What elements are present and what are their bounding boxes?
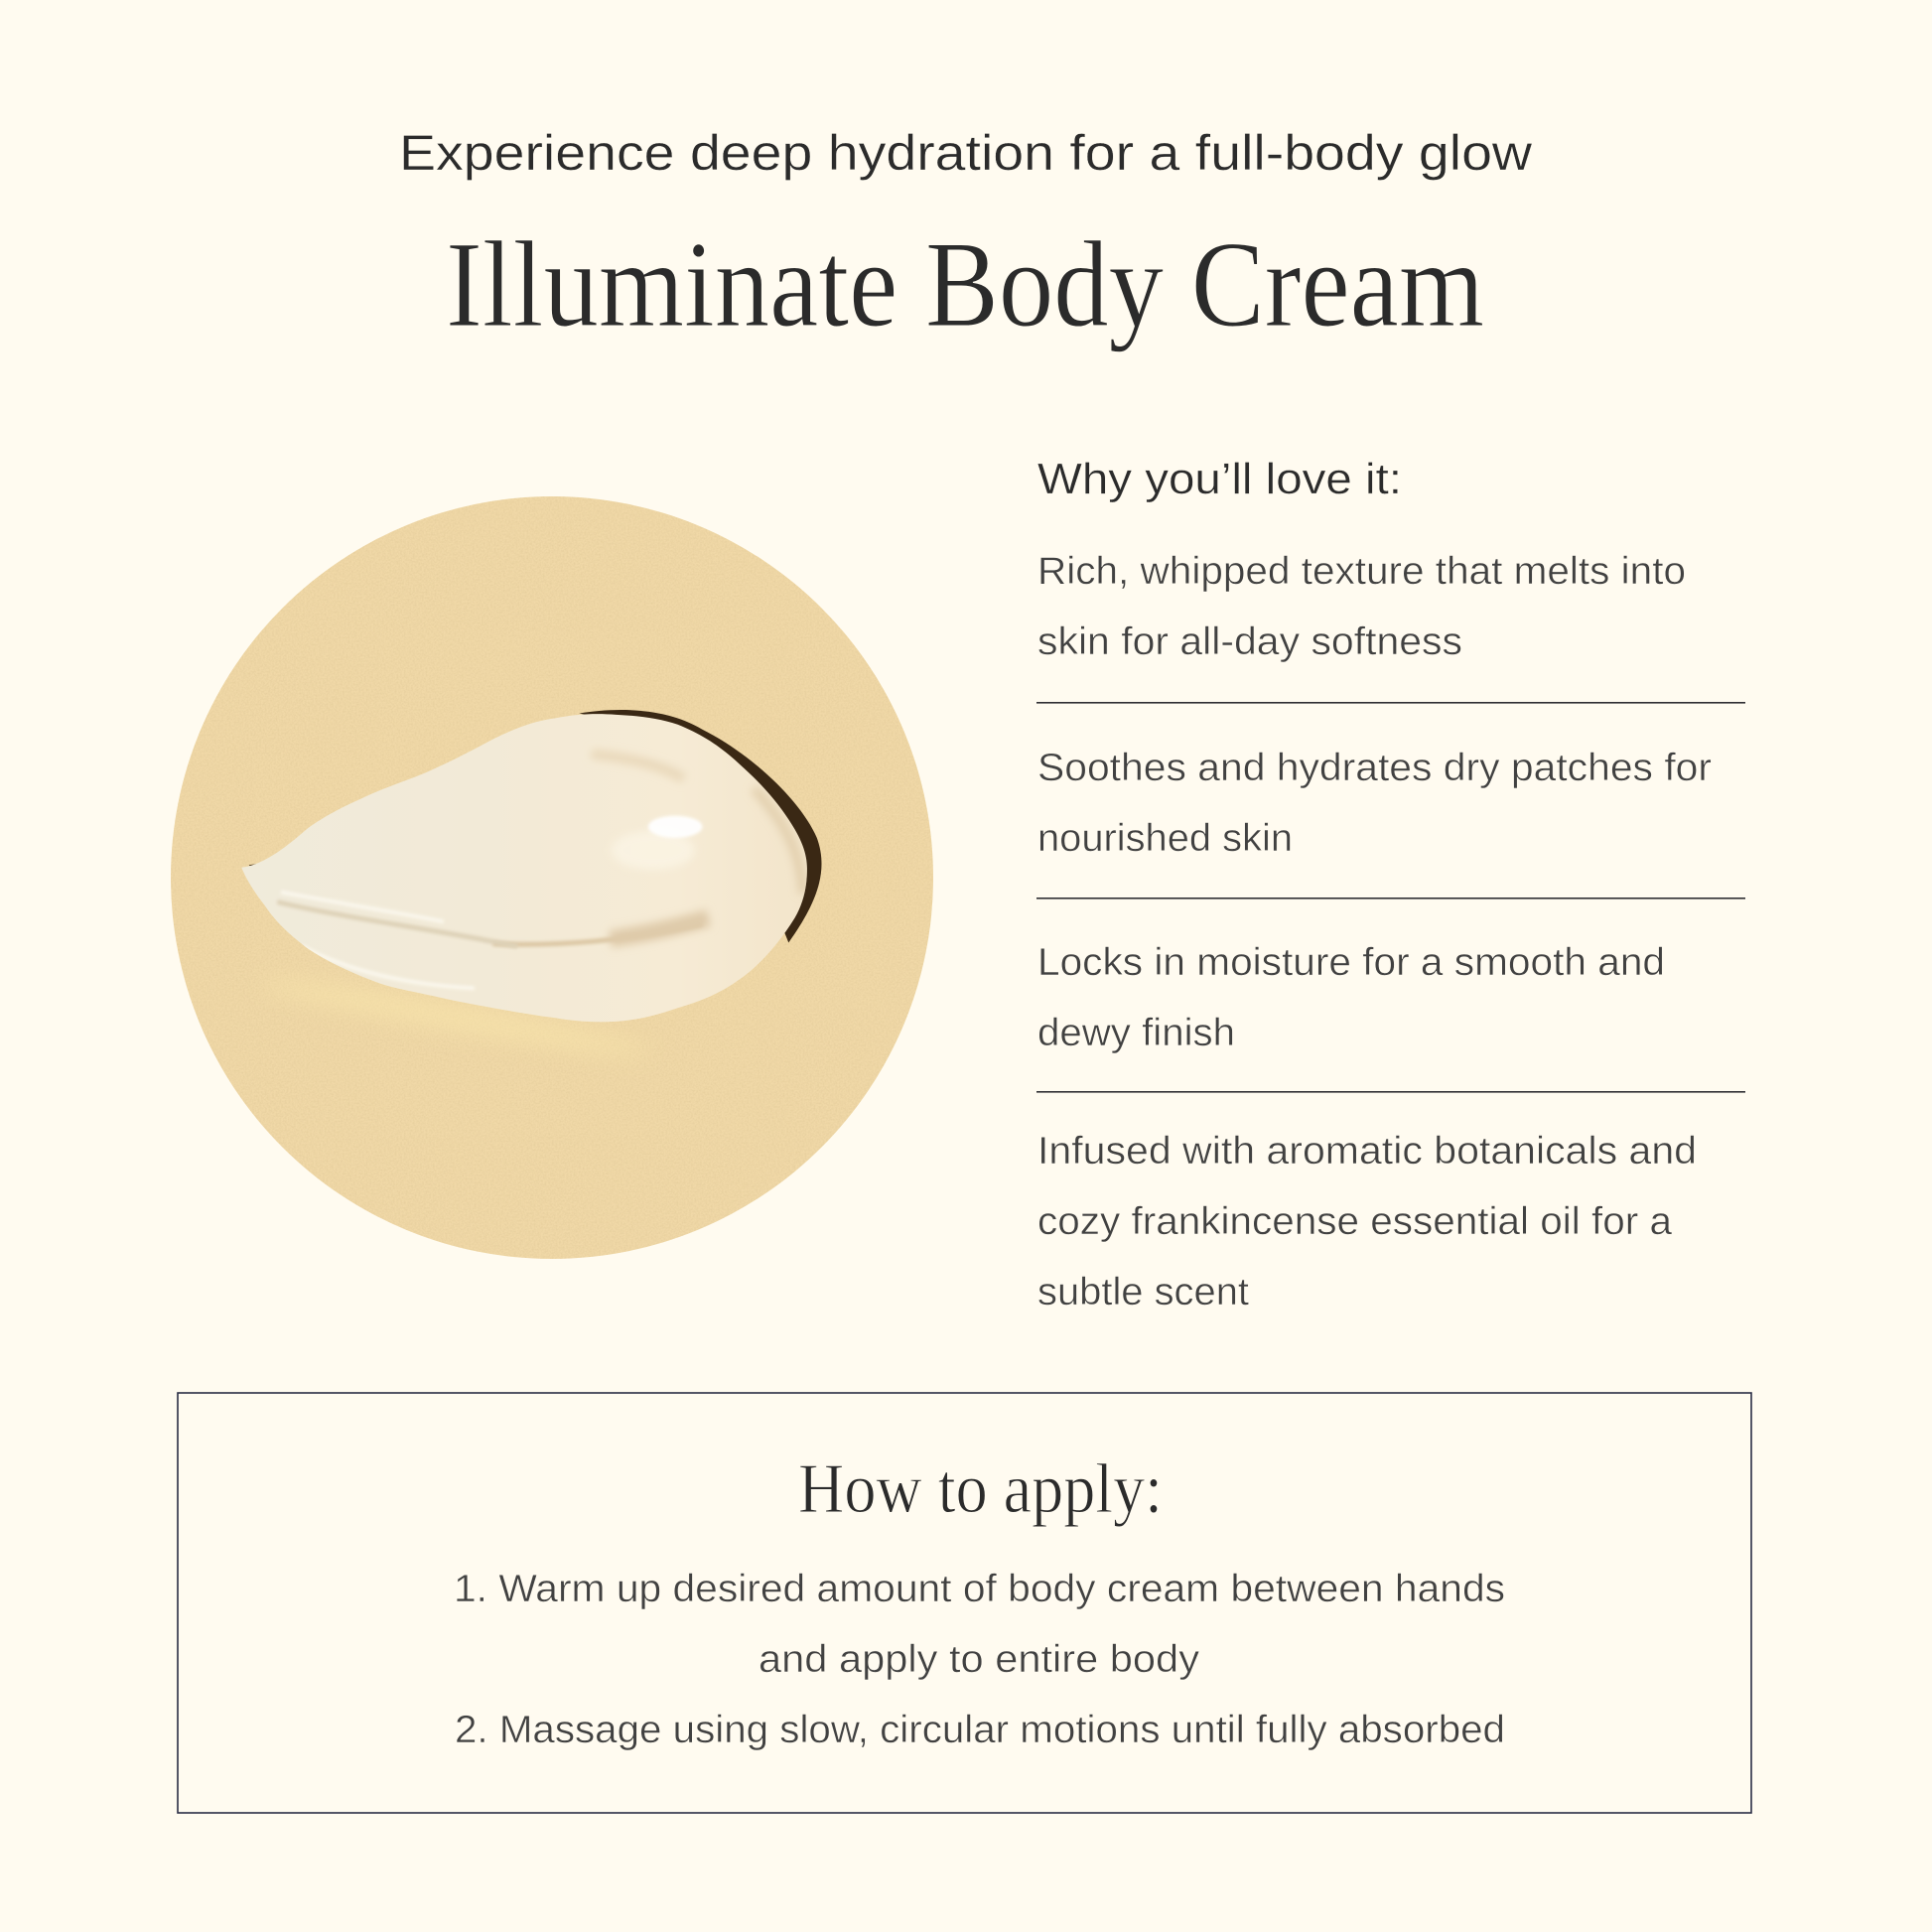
instructions: 2. Massage using slow, circular motions until fully absorbed <box>455 1709 1505 1751</box>
subtitle: Experience deep hydration for a full-body glow <box>399 125 1533 181</box>
benefit 4: cozy frankincense essential oil for a <box>1037 1200 1672 1243</box>
benefit 3: dewy finish <box>1037 1012 1235 1054</box>
instructions <box>454 1568 1505 1751</box>
benefit 1 <box>1037 550 1686 663</box>
benefit 2: Soothes and hydrates dry patches for <box>1037 747 1712 789</box>
panel: how to apply <box>178 1393 1751 1813</box>
benefit 1: Rich, whipped texture that melts into <box>1037 550 1686 593</box>
benefit 4: subtle scent <box>1037 1271 1249 1313</box>
benefit 1: skin for all-day softness <box>1037 621 1462 663</box>
benefit 4: Infused with aromatic botanicals and <box>1037 1130 1697 1173</box>
benefit 3 <box>1037 941 1665 1054</box>
sand circle <box>171 496 933 1259</box>
heading: why you'll love it: Why you’ll love it: <box>1037 455 1402 503</box>
instructions: and apply to entire body <box>759 1638 1200 1681</box>
panel border <box>178 1393 1751 1813</box>
benefit 2: nourished skin <box>1037 817 1293 860</box>
title: Illuminate Body Cream <box>446 216 1484 352</box>
instructions: 1. Warm up desired amount of body cream between hands <box>454 1568 1505 1610</box>
cream smear <box>241 710 822 1064</box>
product photo: cream smear on sand circle <box>171 496 933 1259</box>
benefit 4 <box>1037 1130 1697 1313</box>
heading: how to apply: How to apply: <box>798 1450 1163 1528</box>
benefit 3: Locks in moisture for a smooth and <box>1037 941 1665 984</box>
benefit 2 <box>1037 747 1712 860</box>
